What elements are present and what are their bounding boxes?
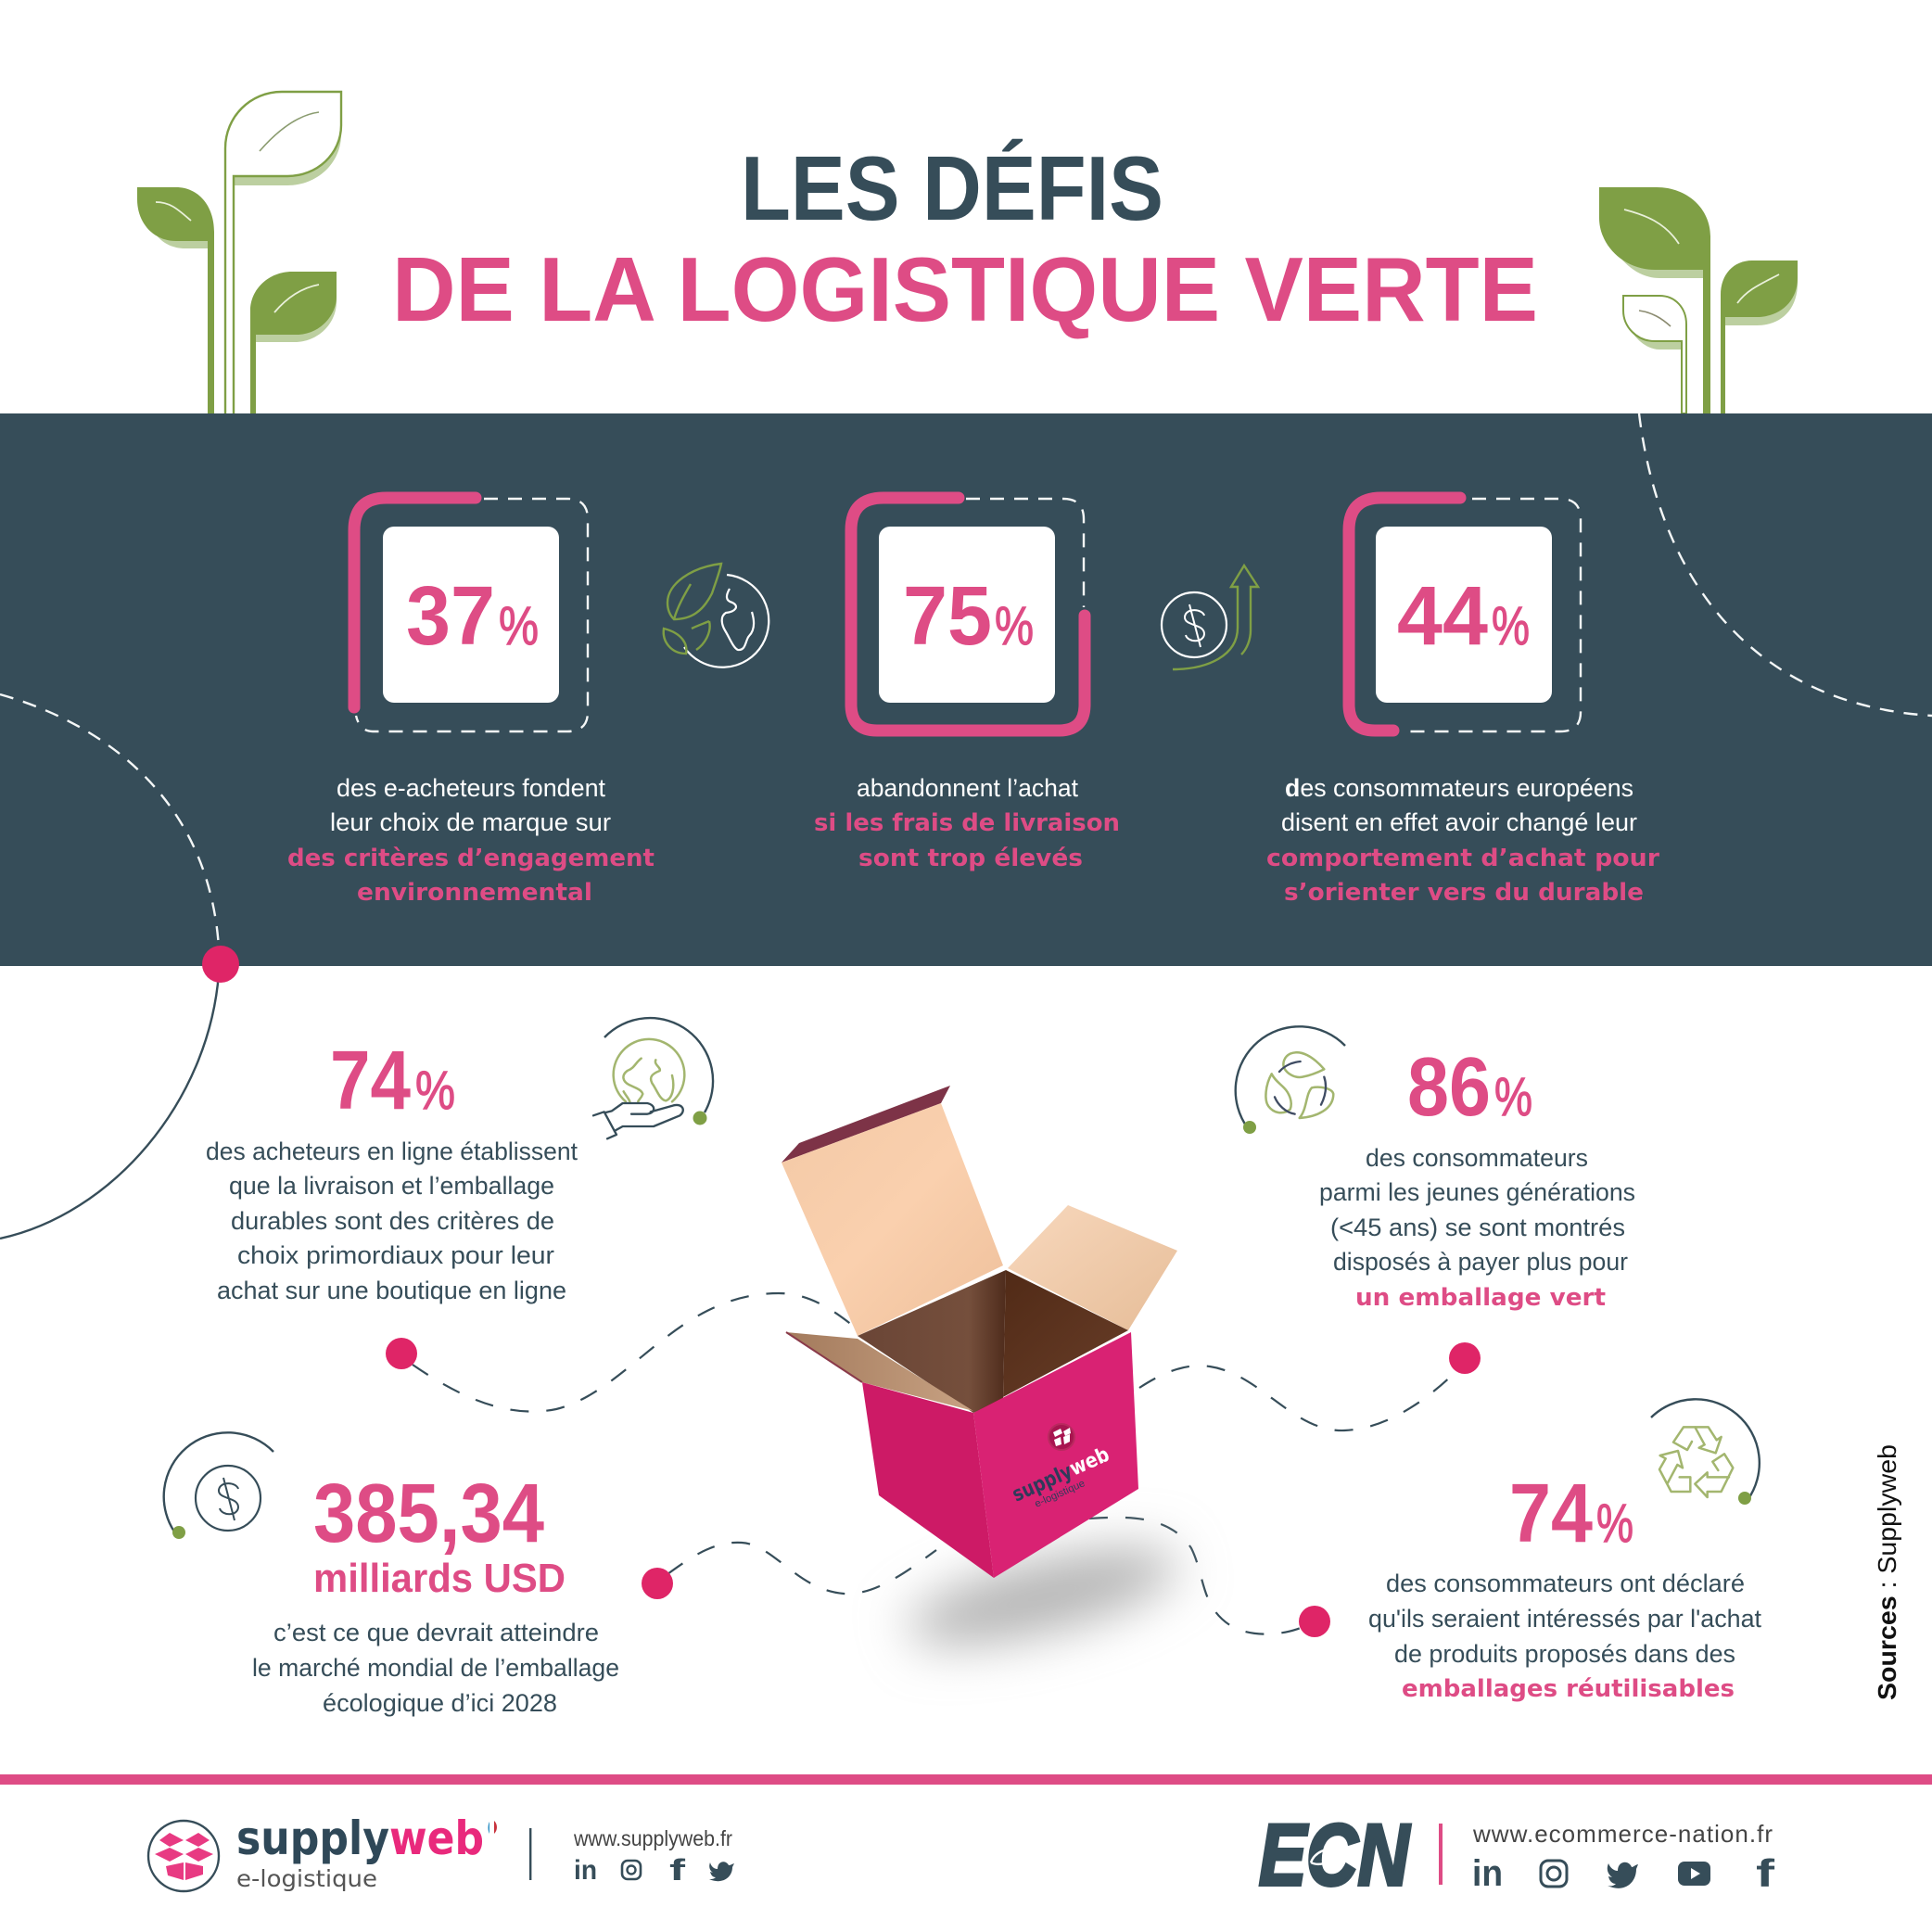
text: 74 percent top left description: que la livraison et l’emballage: [229, 1172, 554, 1200]
text: 74 percent top left description: durables sont des critères de: [231, 1207, 554, 1235]
footer separator left: [529, 1828, 531, 1880]
text: stat 75 description: [814, 774, 1120, 872]
text: stat 37 description: environnemental: [357, 879, 592, 907]
icon: recycling arrows: [1651, 1399, 1760, 1505]
contact: supplyweb links: www.supplyweb.fr: [573, 1826, 732, 1850]
text: stat 44 description: comportement d’achat pour: [1266, 845, 1659, 872]
panel: stat 37: [354, 498, 588, 731]
text: stat 75 description: abandonnent l’achat: [857, 774, 1078, 802]
text: sources: Sources : Supplyweb: [1873, 1444, 1901, 1700]
stat: 74 percent bottom right: 74: [1509, 1468, 1593, 1560]
contact: ecommerce-nation links: in: [1472, 1853, 1503, 1894]
decorative dashed curve right: [1639, 413, 1932, 716]
illustration: open pink box: [782, 1086, 1187, 1664]
footer separator right: [1439, 1824, 1443, 1885]
text: 86 percent description: un emballage vert: [1355, 1284, 1606, 1312]
marker: pink dot on band edge: [202, 946, 239, 983]
panel: stat 44: %: [1492, 596, 1530, 656]
icon: dollar with arrow: [1162, 566, 1258, 669]
title: DE LA LOGISTIQUE VERTE: [392, 238, 1538, 340]
text: 74 percent bottom right description: qu'ils seraient intéressés par l'achat: [1368, 1605, 1761, 1633]
panel: stat 44: 44: [1397, 570, 1488, 663]
decorative line below band: [0, 973, 219, 1239]
icon: hand holding globe: [593, 1018, 713, 1138]
decorative dashed curve left: [0, 694, 219, 947]
marker: dot bottom right: [1299, 1606, 1330, 1637]
text: 86 percent description: [1319, 1144, 1635, 1312]
icon: globe with leaves: [664, 564, 769, 667]
text: 74 percent top left description: des acheteurs en ligne établissent: [206, 1138, 578, 1165]
stat: market value: 385,34: [313, 1468, 544, 1560]
text: 86 percent description: disposés à payer plus pour: [1333, 1248, 1628, 1276]
stat: 74 percent bottom right: %: [1596, 1493, 1633, 1554]
panel: stat 75: [851, 498, 1085, 731]
icon: leaves recycling: [1236, 1026, 1345, 1134]
panel: stat 75: %: [995, 596, 1034, 656]
text: stat 37 description: leur choix de marque sur: [330, 808, 611, 836]
logo: supplyweb: supply: [236, 1811, 389, 1865]
stat: 86 percent: 86: [1407, 1041, 1491, 1134]
icon: dollar coin: [164, 1432, 273, 1539]
text: market description: le marché mondial de l’emballage: [252, 1654, 619, 1682]
icon: right plants: [1599, 187, 1798, 413]
text: stat 37 description: [287, 774, 655, 907]
text: stat 37 description: des critères d’engagement: [287, 845, 655, 872]
text: stat 44 description: disent en effet avoir changé leur: [1281, 808, 1637, 836]
text: 74 percent bottom right description: de produits proposés dans des: [1394, 1640, 1735, 1668]
box logo: web: [1066, 1443, 1113, 1481]
text: 86 percent description: (<45 ans) se sont montrés: [1330, 1214, 1625, 1241]
panel: stat 75: 75: [903, 570, 992, 663]
logo: ECN: ECN: [1259, 1806, 1411, 1903]
stat: market value: milliards USD: [313, 1556, 566, 1601]
contact: ecommerce-nation links: www.ecommerce-nation.fr: [1472, 1820, 1773, 1848]
text: stat 75 description: sont trop élevés: [858, 845, 1083, 872]
text: 86 percent description: des consommateurs: [1366, 1144, 1588, 1172]
text: stat 44 description: des consommateurs européens: [1285, 774, 1633, 802]
connector: dashed path top left: [413, 1293, 853, 1412]
text: market description: c’est ce que devrait atteindre: [273, 1619, 599, 1646]
panel: stat 37: 37: [406, 570, 495, 663]
text: market description: [252, 1619, 619, 1717]
text: 74 percent bottom right description: [1368, 1570, 1761, 1703]
footer divider bar: [0, 1774, 1932, 1785]
panel: stat 44: [1349, 498, 1581, 731]
icon: left plants: [137, 92, 341, 413]
stat: market value: [313, 1468, 566, 1601]
panel: stat 37: %: [499, 596, 539, 656]
text: 74 percent bottom right description: des consommateurs ont déclaré: [1386, 1570, 1745, 1597]
title: [392, 137, 1538, 340]
connector: dashed path bottom right: [1089, 1518, 1303, 1634]
stat: 74 percent top left: %: [415, 1061, 455, 1121]
stat: 74 percent top left: 74: [330, 1035, 411, 1127]
title: LES DÉFIS: [741, 137, 1163, 239]
marker: dot top right: [1449, 1342, 1481, 1374]
stat: 86 percent: %: [1494, 1067, 1532, 1127]
logo: supplyweb: [148, 1811, 497, 1892]
contact: supplyweb links: [573, 1826, 734, 1887]
text: 74 percent top left description: choix primordiaux pour leur: [237, 1241, 554, 1269]
box logo: supply: [1009, 1460, 1076, 1506]
text: stat 44 description: s’orienter vers du durable: [1284, 879, 1644, 907]
text: stat 75 description: si les frais de livraison: [814, 809, 1120, 837]
marker: dot bottom left: [642, 1568, 673, 1599]
box logo: e-logistique: [1033, 1478, 1087, 1510]
connector: dashed path bottom left: [667, 1543, 936, 1594]
contact: ecommerce-nation links: [1472, 1820, 1775, 1895]
text: stat 37 description: des e-acheteurs fondent: [337, 774, 605, 802]
text: 74 percent bottom right description: emballages réutilisables: [1402, 1675, 1735, 1703]
contact: supplyweb links: f: [669, 1853, 686, 1887]
contact: ecommerce-nation links: f: [1756, 1851, 1775, 1895]
connector: dashed path top right: [1139, 1366, 1460, 1430]
marker: dot top left: [386, 1338, 417, 1369]
text: 86 percent description: parmi les jeunes générations: [1319, 1178, 1635, 1206]
text: 74 percent top left description: [206, 1138, 578, 1304]
text: 74 percent top left description: achat sur une boutique en ligne: [217, 1277, 566, 1304]
text: market description: écologique d’ici 2028: [323, 1689, 557, 1717]
logo: supplyweb: web: [389, 1811, 484, 1865]
box logo: [1009, 1424, 1113, 1510]
contact: supplyweb links: in: [574, 1855, 597, 1886]
logo: supplyweb: e-logistique: [236, 1865, 377, 1892]
panel: dark band: [0, 413, 1932, 966]
text: stat 44 description: [1266, 774, 1659, 907]
